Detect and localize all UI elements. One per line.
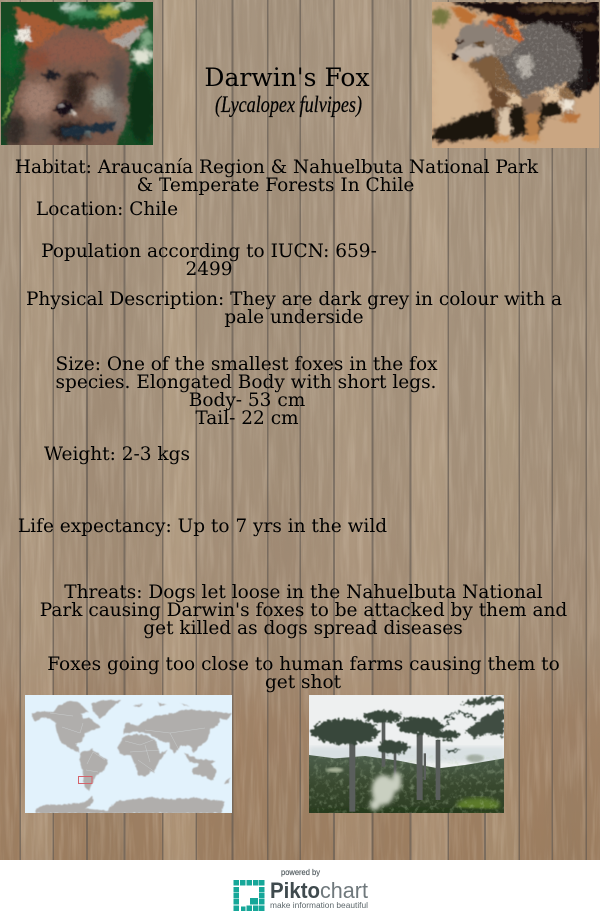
text: threats from dogs: Park causing Darwin's foxes to be attacked by them and [40,600,567,621]
footer band [0,860,600,920]
text: population: 2499 [185,259,233,280]
text: population [41,241,377,280]
text: size: Body- 53 cm [189,390,306,411]
text: threats from farms [47,654,560,693]
text: size: Tail- 22 cm [195,408,299,429]
text: population: Population according to IUCN: 659- [41,241,377,262]
text: size: Size: One of the smallest foxes in the fox [55,354,438,375]
wordmark: chart [320,878,368,903]
text: habitat: Habitat: Araucanía Region & Nahuelbuta National Park [15,157,539,178]
powered by label: powered by [281,868,320,877]
text: habitat [15,157,539,196]
logo icon [234,880,264,911]
Piktochart logo [234,868,368,911]
text: threats from farms: get shot [265,672,342,693]
tagline: make information beautiful [270,901,368,910]
wordmark [270,878,368,903]
wordmark: Pikto [270,878,320,903]
text: size: species. Elongated Body with short legs. [56,372,436,393]
text: physical description: pale underside [224,307,364,328]
title: Darwin's Fox [204,63,370,92]
text: threats from dogs: get killed as dogs spread diseases [143,618,463,639]
photo: fox face close-up [0,0,155,148]
text: size [55,354,438,429]
world map with Chile highlighted [25,695,232,813]
subtitle: scientific name: (Lycalopex fulvipes) [215,92,362,117]
text: habitat: & Temperate Forests In Chile [137,175,414,196]
text: weight: Weight: 2-3 kgs [44,444,190,465]
text: threats from farms: Foxes going too close to human farms causing them to [47,654,560,675]
text: physical description: Physical Description: They are dark grey in colour with a [26,289,562,310]
photo: monkey puzzle trees [305,695,505,814]
photo: fox standing on sandy ground [430,0,600,150]
text: life expectancy: Life expectancy: Up to 7 yrs in the wild [18,516,387,537]
text: threats from dogs: Threats: Dogs let loose in the Nahuelbuta National [64,582,543,603]
text: location: Location: Chile [36,199,178,220]
text: physical description [26,289,562,328]
text: threats from dogs [40,582,567,639]
